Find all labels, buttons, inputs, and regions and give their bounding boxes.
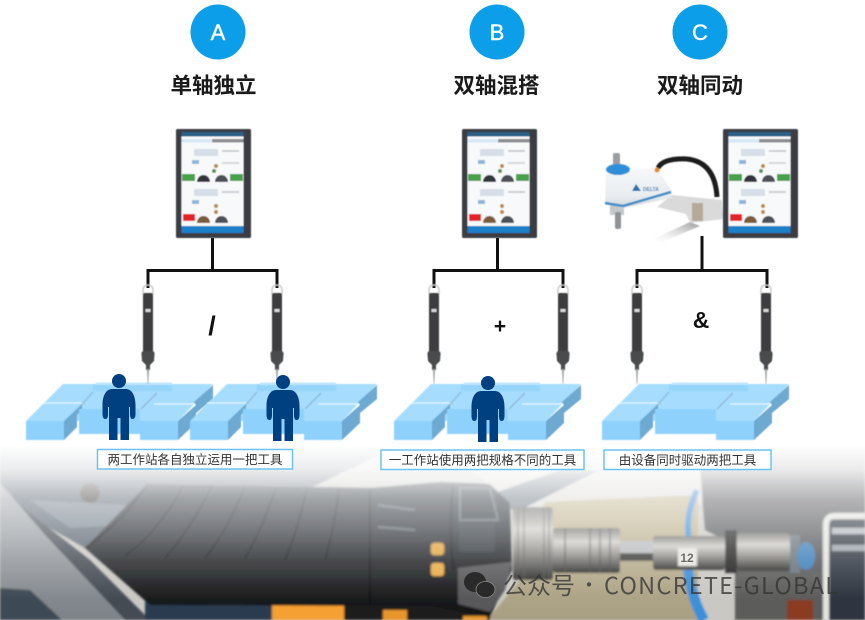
heading badge: A: A	[211, 20, 226, 45]
watermark text: ·	[579, 569, 599, 598]
heading badge: B	[470, 4, 524, 60]
beams behind	[440, 445, 720, 510]
workstation blocks: A left	[26, 382, 213, 440]
symbol: slash: /	[208, 311, 216, 341]
caption: B	[381, 450, 584, 470]
watermark text: 公众号	[503, 566, 575, 601]
collar highlights	[378, 488, 498, 530]
connector lines: B	[434, 238, 563, 288]
tablet: C	[723, 129, 798, 238]
beige surface	[487, 495, 698, 620]
watermark text: CONCRETE-GLOBAL	[604, 567, 838, 601]
caption: B: 一工作站使用两把规格不同的工具	[389, 452, 577, 468]
screwdriver: A right	[270, 285, 284, 384]
caption: C	[604, 450, 771, 470]
caption: A	[98, 450, 292, 469]
chuck	[513, 507, 553, 580]
caption: A: 两工作站各自独立运用一把工具	[107, 452, 283, 467]
operator: A right	[266, 375, 300, 441]
screwdriver: B right	[556, 285, 570, 384]
heading: 双轴混搭: 双轴混搭	[453, 74, 540, 98]
workstation blocks: B	[394, 382, 581, 440]
upper-left machinery	[0, 445, 400, 560]
workstation blocks: C	[602, 382, 789, 440]
operator: A left	[102, 374, 136, 440]
heading badge: B: B	[490, 20, 504, 45]
heading: 单轴独立: 单轴独立	[170, 73, 257, 98]
heading badge: C: C	[692, 20, 708, 45]
tablet: A	[176, 129, 251, 238]
connector lines: C	[637, 236, 767, 288]
operator: B	[472, 376, 504, 442]
tool grip	[85, 482, 512, 617]
symbol: ampersand: &	[693, 307, 709, 333]
watermark text	[503, 566, 838, 601]
fabric sleeve	[0, 483, 125, 620]
fabric sleeve dark edge	[20, 505, 150, 620]
socket size mark: 12	[680, 551, 694, 565]
screwdriver: C left	[630, 285, 644, 384]
right frame	[826, 516, 865, 620]
heading badge: C	[672, 4, 728, 60]
heading badge: A	[190, 4, 246, 60]
screwdriver: C right	[759, 285, 773, 384]
blue air hose	[688, 490, 697, 540]
right mesh and machine	[698, 445, 865, 620]
robot arm	[605, 153, 724, 243]
screwdriver: B left	[427, 285, 441, 384]
watermark icon: chat bubbles	[464, 572, 495, 598]
lighter collar patch behind watermark icon	[458, 562, 512, 612]
panel: workshop photo background	[0, 432, 865, 620]
robot arm: DELTA	[643, 187, 659, 193]
symbol: plus: +	[494, 315, 506, 338]
tablet: B	[462, 129, 537, 238]
screwdriver: A left	[141, 285, 155, 384]
tool amber light	[431, 543, 444, 555]
heading: 双轴同动: 双轴同动	[657, 74, 743, 98]
caption: C: 由设备同时驱动两把工具	[619, 452, 757, 468]
bottom strip	[145, 600, 275, 620]
workstation blocks: A right	[190, 382, 377, 440]
connector lines: A	[148, 238, 277, 288]
